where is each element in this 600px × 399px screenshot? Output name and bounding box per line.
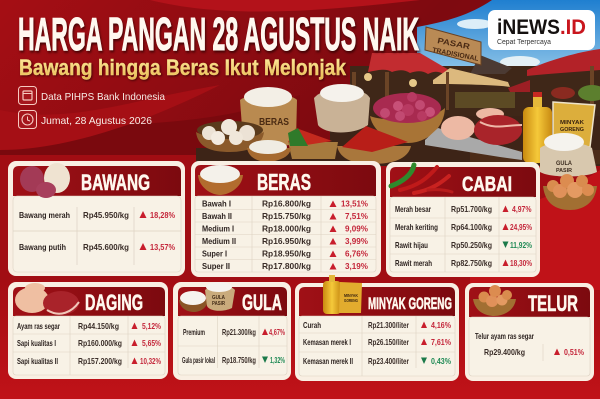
row: bawah I (202, 198, 369, 208)
row: bawah II: 7,51% (345, 211, 369, 221)
row: rawit merah: Rawit merah (395, 258, 432, 268)
subtitle: Bawang hingga Beras Ikut Melonjak (19, 55, 347, 80)
icon: cooking oil bag: MINYAK (560, 120, 584, 126)
row: rawit merah: 18,30% (510, 258, 532, 268)
row: kemasan merek II: Rp23.400/liter (368, 356, 410, 366)
row: merah keriting (395, 222, 532, 232)
icon: chili peppers (391, 165, 452, 193)
row: bawang putih: Bawang putih (19, 242, 66, 252)
row: bawah II: Bawah II (202, 211, 232, 221)
row: sapi kualitas I: 5,65% (142, 338, 161, 348)
egg price: Rp29.400/kg (484, 347, 525, 357)
icon: oil bottle and bag: GORENG (344, 298, 358, 303)
row: sapi kualitas I: Rp160.000/kg (78, 338, 122, 348)
row: bawah I: 13,51% (341, 198, 369, 208)
row: merah keriting: 24,95% (510, 222, 532, 232)
row: merah keriting: Merah keriting (395, 222, 438, 232)
icon: chicken and beef (15, 283, 79, 315)
date text: Jumat, 28 Agustus 2026 (41, 115, 152, 127)
row: ayam ras segar: 5,12% (142, 321, 161, 331)
row: medium I: Rp18.000/kg (262, 224, 311, 234)
row: sapi kualitas I: Sapi kualitas I (17, 338, 56, 348)
row: gula pasir lokal (182, 355, 285, 365)
row: ayam ras segar: Ayam ras segar (17, 321, 61, 331)
icon: cooking oil bag (553, 102, 595, 147)
row: merah keriting: Rp64.100/kg (451, 222, 492, 232)
panel: cabai (386, 162, 540, 277)
row: premium: Premium (183, 327, 205, 337)
panel: gula (173, 282, 291, 380)
icon: clock (18, 110, 36, 128)
egg name: Telur ayam ras segar (475, 331, 535, 341)
row: kemasan merek I: Kemasan merek I (303, 337, 351, 347)
icon: rice sack two (314, 84, 370, 132)
row: merah besar: 4,97% (512, 204, 532, 214)
row: bawang merah (19, 210, 175, 220)
row: ayam ras segar (17, 321, 161, 331)
icon: meat tray (425, 108, 522, 160)
row: kemasan merek II: 0,43% (431, 356, 451, 366)
heading: DAGING (85, 290, 143, 315)
row: curah: Rp21.300/liter (368, 320, 410, 330)
row: super I: 6,76% (345, 248, 369, 258)
row: premium: Rp21.300/kg (222, 327, 256, 337)
row: kemasan merek II: Kemasan merek II (303, 356, 353, 366)
row: medium I (202, 224, 369, 234)
icon: onion basket (370, 92, 445, 143)
row: rawit hijau: Rp50.250/kg (451, 240, 492, 250)
row: gula pasir lokal: Rp18.750/kg (222, 355, 256, 365)
panel: daging (8, 282, 168, 379)
row: curah: 4,16% (431, 320, 451, 330)
row: bawang merah: Rp45.950/kg (83, 210, 129, 220)
row: bawah I: Bawah I (202, 198, 231, 208)
row: super II: 3,19% (345, 261, 369, 271)
row: rawit hijau (395, 240, 532, 250)
logo: iNEWS.ID: iNEWS (497, 16, 560, 39)
row: kemasan merek I: 7,61% (431, 337, 451, 347)
icon: cooking oil bag: GORENG (560, 127, 584, 133)
row: super I (202, 248, 369, 258)
egg change: 0,51% (564, 347, 584, 357)
row: curah (303, 320, 451, 330)
icon: oil bottle (523, 92, 552, 163)
row: bawang merah: Bawang merah (19, 210, 70, 220)
row: rawit merah: Rp82.750/kg (451, 258, 492, 268)
icon: rice bowl (198, 165, 243, 195)
logo: iNEWS.ID: Cepat Terpercaya (497, 39, 551, 46)
icon: onion and garlic (20, 163, 70, 198)
row: super II: Super II (202, 261, 230, 271)
row: gula pasir lokal: Gula pasir lokal (182, 355, 215, 365)
icon: egg basket (473, 285, 516, 316)
row: bawah I: Rp16.800/kg (262, 198, 311, 208)
row: medium II (202, 236, 369, 246)
row: bawang putih: Rp45.600/kg (83, 242, 129, 252)
icon: calendar (18, 86, 36, 104)
row: medium II: 3,99% (345, 236, 369, 246)
sign: Pasar Tradisional: PASAR (437, 36, 471, 51)
row: kemasan merek I (303, 337, 451, 347)
icon: oil bottle and bag: MINYAK (344, 293, 359, 298)
icon: sugar bowl and sack: PASIR (212, 301, 225, 307)
sign: Pasar Tradisional (425, 27, 481, 65)
row: merah besar: Merah besar (395, 204, 432, 214)
row: super I: Rp18.950/kg (262, 248, 311, 258)
row: premium: 4,67% (269, 327, 285, 337)
row: bawang merah: 18,28% (150, 210, 175, 220)
row: merah besar (395, 204, 532, 214)
panel: minyak goreng (295, 275, 459, 381)
icon: sugar sack: PASIR (556, 168, 572, 174)
row: kemasan merek II (303, 356, 451, 366)
row: rawit hijau: Rawit hijau (395, 240, 428, 250)
heading: TELUR (528, 291, 578, 316)
row: bawah II (202, 211, 369, 221)
row: sapi kualitas II: Rp157.200/kg (78, 356, 122, 366)
icon: rice sack (240, 87, 297, 148)
icon: sugar bowl and sack (179, 282, 235, 312)
row: bawang putih (19, 242, 175, 252)
row: premium (183, 327, 285, 337)
row: sapi kualitas II: Sapi kualitas II (17, 356, 58, 366)
row: sapi kualitas II (17, 356, 161, 366)
heading: MINYAK GORENG (368, 294, 452, 313)
row: super I: Super I (202, 248, 227, 258)
heading: CABAI (462, 173, 512, 196)
row: merah besar: Rp51.700/kg (451, 204, 492, 214)
row: kemasan merek I: Rp26.150/liter (368, 337, 410, 347)
row: sapi kualitas I (17, 338, 161, 348)
icon: sugar sack: GULA (556, 161, 573, 167)
logo: iNEWS.ID: .ID (560, 16, 586, 39)
heading: GULA (242, 290, 282, 315)
row: bawah II: Rp15.750/kg (262, 211, 311, 221)
heading: BAWANG (81, 170, 150, 195)
icon: chili baskets (288, 126, 411, 164)
row: ayam ras segar: Rp44.150/kg (78, 321, 119, 331)
icon: oil bottle and bag (323, 275, 362, 314)
row: super II (202, 261, 369, 271)
row: rawit hijau: 11,92% (510, 240, 532, 250)
row: medium II: Medium II (202, 236, 236, 246)
panel: telur (465, 283, 594, 381)
icon: sugar sack (540, 133, 597, 176)
icon: egg basket (543, 174, 597, 210)
sign: Pasar Tradisional: TRADISIONAL (432, 47, 480, 63)
panel: beras (191, 161, 381, 277)
row: medium II: Rp16.950/kg (262, 236, 311, 246)
source text: Data PIHPS Bank Indonesia (41, 91, 165, 103)
icon: garlic basket (196, 119, 264, 152)
row: medium I: 9,09% (345, 224, 369, 234)
row: medium I: Medium I (202, 224, 234, 234)
logo: iNEWS.ID (488, 10, 595, 50)
icon: rice sack: BERAS (259, 117, 289, 128)
panel: bawang (8, 161, 185, 276)
row: curah: Curah (303, 320, 321, 330)
row: super II: Rp17.800/kg (262, 261, 311, 271)
row: gula pasir lokal: 1,32% (270, 355, 285, 365)
icon: rice bowl (247, 140, 291, 162)
icon: sugar bowl and sack: GULA (212, 295, 225, 301)
heading: BERAS (257, 169, 311, 195)
market scene (196, 0, 600, 166)
row: rawit merah (395, 258, 532, 268)
row: sapi kualitas II: 10,32% (140, 356, 161, 366)
row: bawang putih: 13,57% (150, 242, 175, 252)
